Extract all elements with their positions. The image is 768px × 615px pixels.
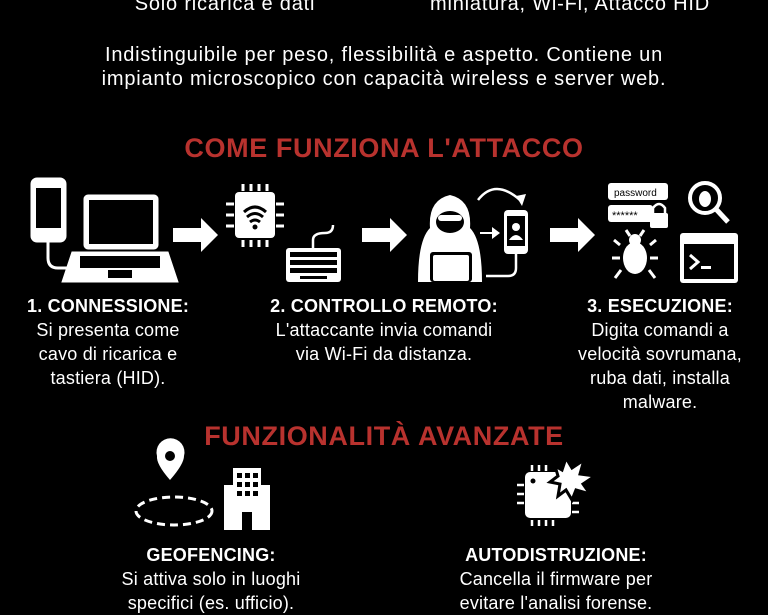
step 1 text: Si presenta come xyxy=(36,320,180,340)
step 1 text: cavo di ricarica e xyxy=(39,344,177,364)
step 3 text: malware. xyxy=(623,392,697,412)
arrow 1 xyxy=(173,218,218,252)
feature: geofencing text: specifici (es. ufficio). xyxy=(128,593,294,613)
step 2 text: 2. CONTROLLO REMOTO: xyxy=(270,296,498,316)
description paragraph: impianto microscopico con capacità wireless e server web. xyxy=(102,68,666,90)
step 3 text: velocità sovrumana, xyxy=(578,344,742,364)
feature: geofencing text xyxy=(122,545,300,613)
heading: come funziona: COME FUNZIONA L'ATTACCO xyxy=(184,133,584,163)
icon: password, bug, terminal: ****** xyxy=(612,210,638,222)
description paragraph: Indistinguibile per peso, flessibilità e aspetto. Contiene un xyxy=(105,44,663,66)
step 3 text: ruba dati, installa xyxy=(590,368,730,388)
feature: autodistruzione text: AUTODISTRUZIONE: xyxy=(465,545,647,565)
icon: password, bug, terminal xyxy=(608,183,738,283)
step 3 text: Digita comandi a xyxy=(591,320,729,340)
step 2 text: via Wi-Fi da distanza. xyxy=(296,344,472,364)
description paragraph xyxy=(102,44,666,90)
step 3 text: 3. ESECUZIONE: xyxy=(587,296,733,316)
icon: password, bug, terminal: password xyxy=(614,188,657,199)
icon: geofencing xyxy=(136,438,270,530)
step 2 text: L'attaccante invia comandi xyxy=(276,320,492,340)
arrow 2 xyxy=(362,218,407,252)
icon: self-destruct chip xyxy=(517,458,595,526)
step 1 text: tastiera (HID). xyxy=(50,368,166,388)
icon: phone and laptop xyxy=(31,178,178,282)
feature: geofencing text: Si attiva solo in luoghi xyxy=(122,569,300,589)
icon: chip wifi and keyboard xyxy=(226,184,341,282)
feature: autodistruzione text xyxy=(460,545,652,613)
step 1 text: 1. CONNESSIONE: xyxy=(27,296,189,316)
step 3 text xyxy=(578,296,742,412)
feature: autodistruzione text: evitare l'analisi forense. xyxy=(460,593,652,613)
arrow 3 xyxy=(550,218,595,252)
feature: autodistruzione text: Cancella il firmware per xyxy=(460,569,652,589)
step 2 text xyxy=(270,296,498,364)
icon: hacker and phone xyxy=(418,189,528,282)
heading: funzionalita avanzate: FUNZIONALITÀ AVANZATE xyxy=(204,421,564,451)
feature: geofencing text: GEOFENCING: xyxy=(146,545,276,565)
step 1 text xyxy=(27,296,189,388)
